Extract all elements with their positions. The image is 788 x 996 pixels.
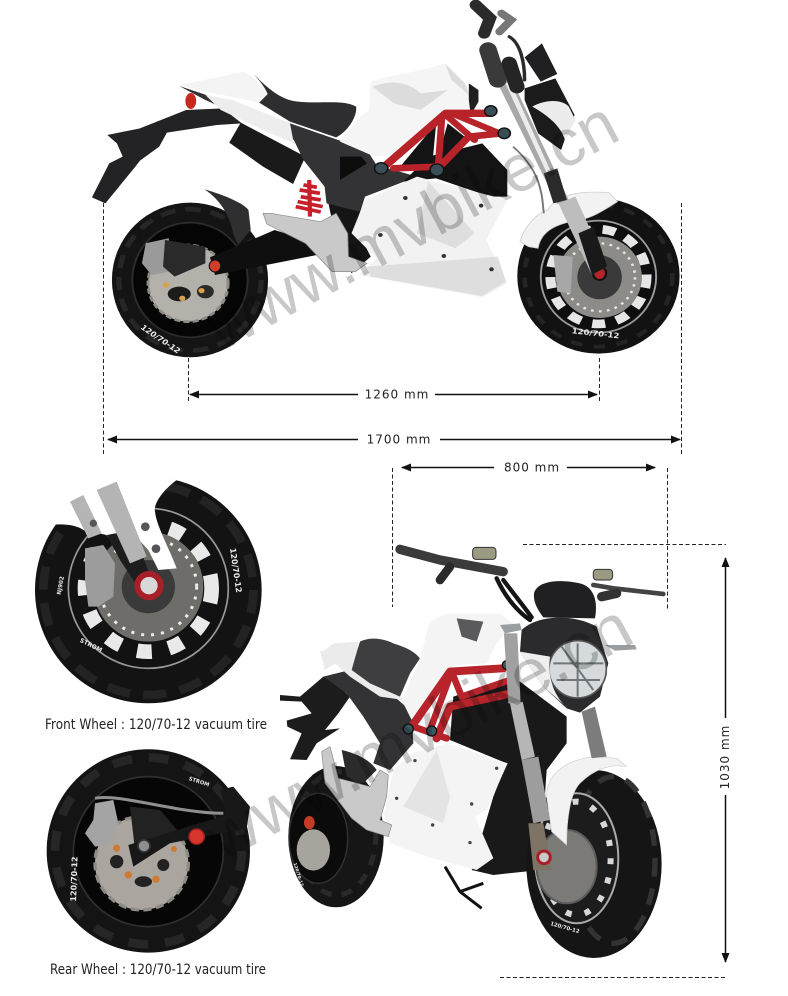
3/4 view dash display — [534, 581, 596, 618]
side view seat — [253, 74, 356, 137]
side view trellis frame — [382, 113, 502, 168]
3/4 view rim — [535, 793, 618, 923]
front detail spoke gaps — [85, 525, 212, 652]
3/4 view rear subframe — [323, 670, 413, 770]
rear detail brake line — [95, 797, 223, 813]
side view headlight cowl — [525, 78, 575, 150]
side view panel screws — [378, 196, 494, 271]
rear detail caliper — [85, 800, 118, 847]
3/4 view headlight detail — [553, 643, 603, 697]
3/4 view white tank — [402, 613, 513, 723]
rear detail axle nut — [138, 840, 150, 852]
3/4 view footpeg bracket — [322, 747, 392, 837]
front detail fender bolts — [90, 520, 160, 553]
front detail tire brand text: STROM — [78, 637, 103, 654]
3/4 view tail bracket — [280, 677, 350, 760]
rear detail bracket — [130, 807, 180, 850]
side view dark tank recess — [469, 83, 478, 115]
caption: front wheel: Front Wheel : 120/70-12 vacuum tire — [45, 717, 267, 733]
front detail inner hub — [122, 560, 175, 613]
rear detail tire brand text: STROM — [188, 776, 210, 788]
3/4 view nacelle — [520, 618, 608, 713]
front detail tire — [35, 477, 262, 703]
side view tank shading — [373, 65, 469, 110]
side view rear wheel — [112, 203, 268, 357]
3/4 view brake disc — [537, 830, 597, 903]
rear detail tread — [55, 758, 242, 944]
side view tail and license plate bracket — [92, 108, 242, 203]
rear detail disc cutouts — [110, 855, 169, 887]
side view rear shock spring — [296, 180, 323, 217]
3/4 view rear wheel — [288, 766, 384, 907]
3/4 view belly panel facets — [403, 750, 450, 823]
side view chassis behind bracket — [328, 197, 371, 273]
caption: rear wheel: Rear Wheel : 120/70-12 vacuum tire — [50, 962, 266, 978]
side view footpeg bracket — [263, 213, 367, 272]
3/4 view tank shading — [457, 618, 483, 642]
rear detail tire — [47, 749, 250, 953]
3/4 view tail white — [320, 642, 403, 700]
front detail disc holes — [100, 538, 197, 635]
side view swingarm — [210, 230, 317, 275]
side view brake cable — [513, 147, 544, 213]
dimension: overall length 1700 mm: 1700 mm — [367, 432, 431, 446]
front detail caliper — [85, 545, 115, 607]
side view black battery case — [403, 143, 507, 197]
side view front fender — [520, 192, 618, 248]
dashed extension lines: side view — [104, 203, 726, 978]
rear wheel detail — [47, 749, 250, 953]
side view handlebar and controls — [476, 5, 525, 87]
side view red tail lamp — [185, 93, 196, 109]
side view front wheel — [517, 198, 680, 354]
side view white belly panel — [352, 177, 507, 297]
rear detail tire size text: 120/70-12 — [69, 856, 80, 902]
front detail fork tubes — [70, 482, 147, 563]
rear detail brake disc — [95, 817, 188, 910]
side view side box — [229, 123, 305, 184]
3/4 view frame bolts — [403, 661, 511, 736]
front detail white fender — [50, 468, 177, 570]
3/4 view trellis frame — [412, 668, 512, 738]
side view white cowl panel — [532, 101, 575, 140]
side view side panel white — [205, 95, 294, 143]
3/4 view right fork — [582, 707, 607, 758]
3/4 view tire text: 120/70-12 — [549, 921, 580, 935]
3/4 view headlight white surround — [520, 652, 568, 708]
front detail axle cap — [137, 574, 161, 597]
3/4 view front fender — [547, 757, 627, 845]
front detail tire size text: 120/70-12 — [228, 547, 243, 593]
side view rear fender — [205, 189, 251, 245]
3/4 view headlight — [549, 641, 606, 698]
3/4 view handlebars — [400, 549, 663, 620]
3/4 view spoke gaps — [543, 802, 611, 915]
rear detail orange bolts — [113, 825, 177, 883]
side view front fork — [498, 78, 607, 275]
watermark: front three-quarter view: www.mvbike.cn — [193, 588, 644, 875]
rear detail swingarm — [128, 787, 250, 867]
side view axle bolt — [209, 260, 221, 272]
side view rear wheel: 120/70-12 — [139, 323, 182, 355]
side view front wheel: 120/70-12 — [571, 327, 620, 340]
3/4 view front wheel — [526, 770, 662, 958]
front detail tread — [43, 485, 253, 695]
3/4 view kickstand — [445, 867, 483, 908]
front detail rim — [68, 508, 228, 668]
front detail sidewall mark: NJ902 — [57, 576, 66, 595]
side view motorcycle — [92, 5, 680, 357]
3/4 view panel screws — [395, 759, 498, 844]
rear detail rim — [73, 777, 223, 927]
3/4 view white belly panel — [384, 743, 508, 870]
watermark: side view: www.mvbike.cn — [192, 85, 629, 365]
front detail brake disc — [93, 532, 203, 642]
3/4 view tire tread — [572, 777, 655, 943]
3/4 view left fork — [504, 633, 550, 823]
dimension: wheelbase 1260 mm: 1260 mm — [365, 388, 429, 402]
side view opening under tank — [340, 157, 367, 180]
side view belly panel facets — [367, 182, 506, 296]
front three-quarter motorcycle — [280, 547, 663, 958]
3/4 view rear fender — [342, 750, 377, 783]
dimension: width 800 mm: 800 mm — [504, 460, 560, 474]
front wheel detail — [35, 468, 262, 703]
3/4 view dark chassis — [450, 677, 567, 875]
side view frame bolts — [375, 106, 510, 176]
3/4 view front axle and caliper — [528, 823, 552, 870]
rear detail red axle cap — [189, 829, 204, 844]
3/4 view seat — [352, 639, 420, 697]
3/4 view turn signals — [500, 623, 637, 651]
3/4 view rear wheel: 120/70-12 — [291, 862, 305, 887]
3/4 view brake reservoirs — [473, 547, 613, 580]
front detail fork leg — [107, 530, 152, 585]
side view frame infill — [402, 123, 469, 165]
side view rear subframe — [179, 86, 417, 212]
side view white fuel tank — [340, 63, 486, 157]
side view white tail cowl — [179, 72, 268, 103]
side view dash display — [525, 43, 557, 82]
dimension: height 1030 mm: 1030 mm — [718, 725, 732, 789]
